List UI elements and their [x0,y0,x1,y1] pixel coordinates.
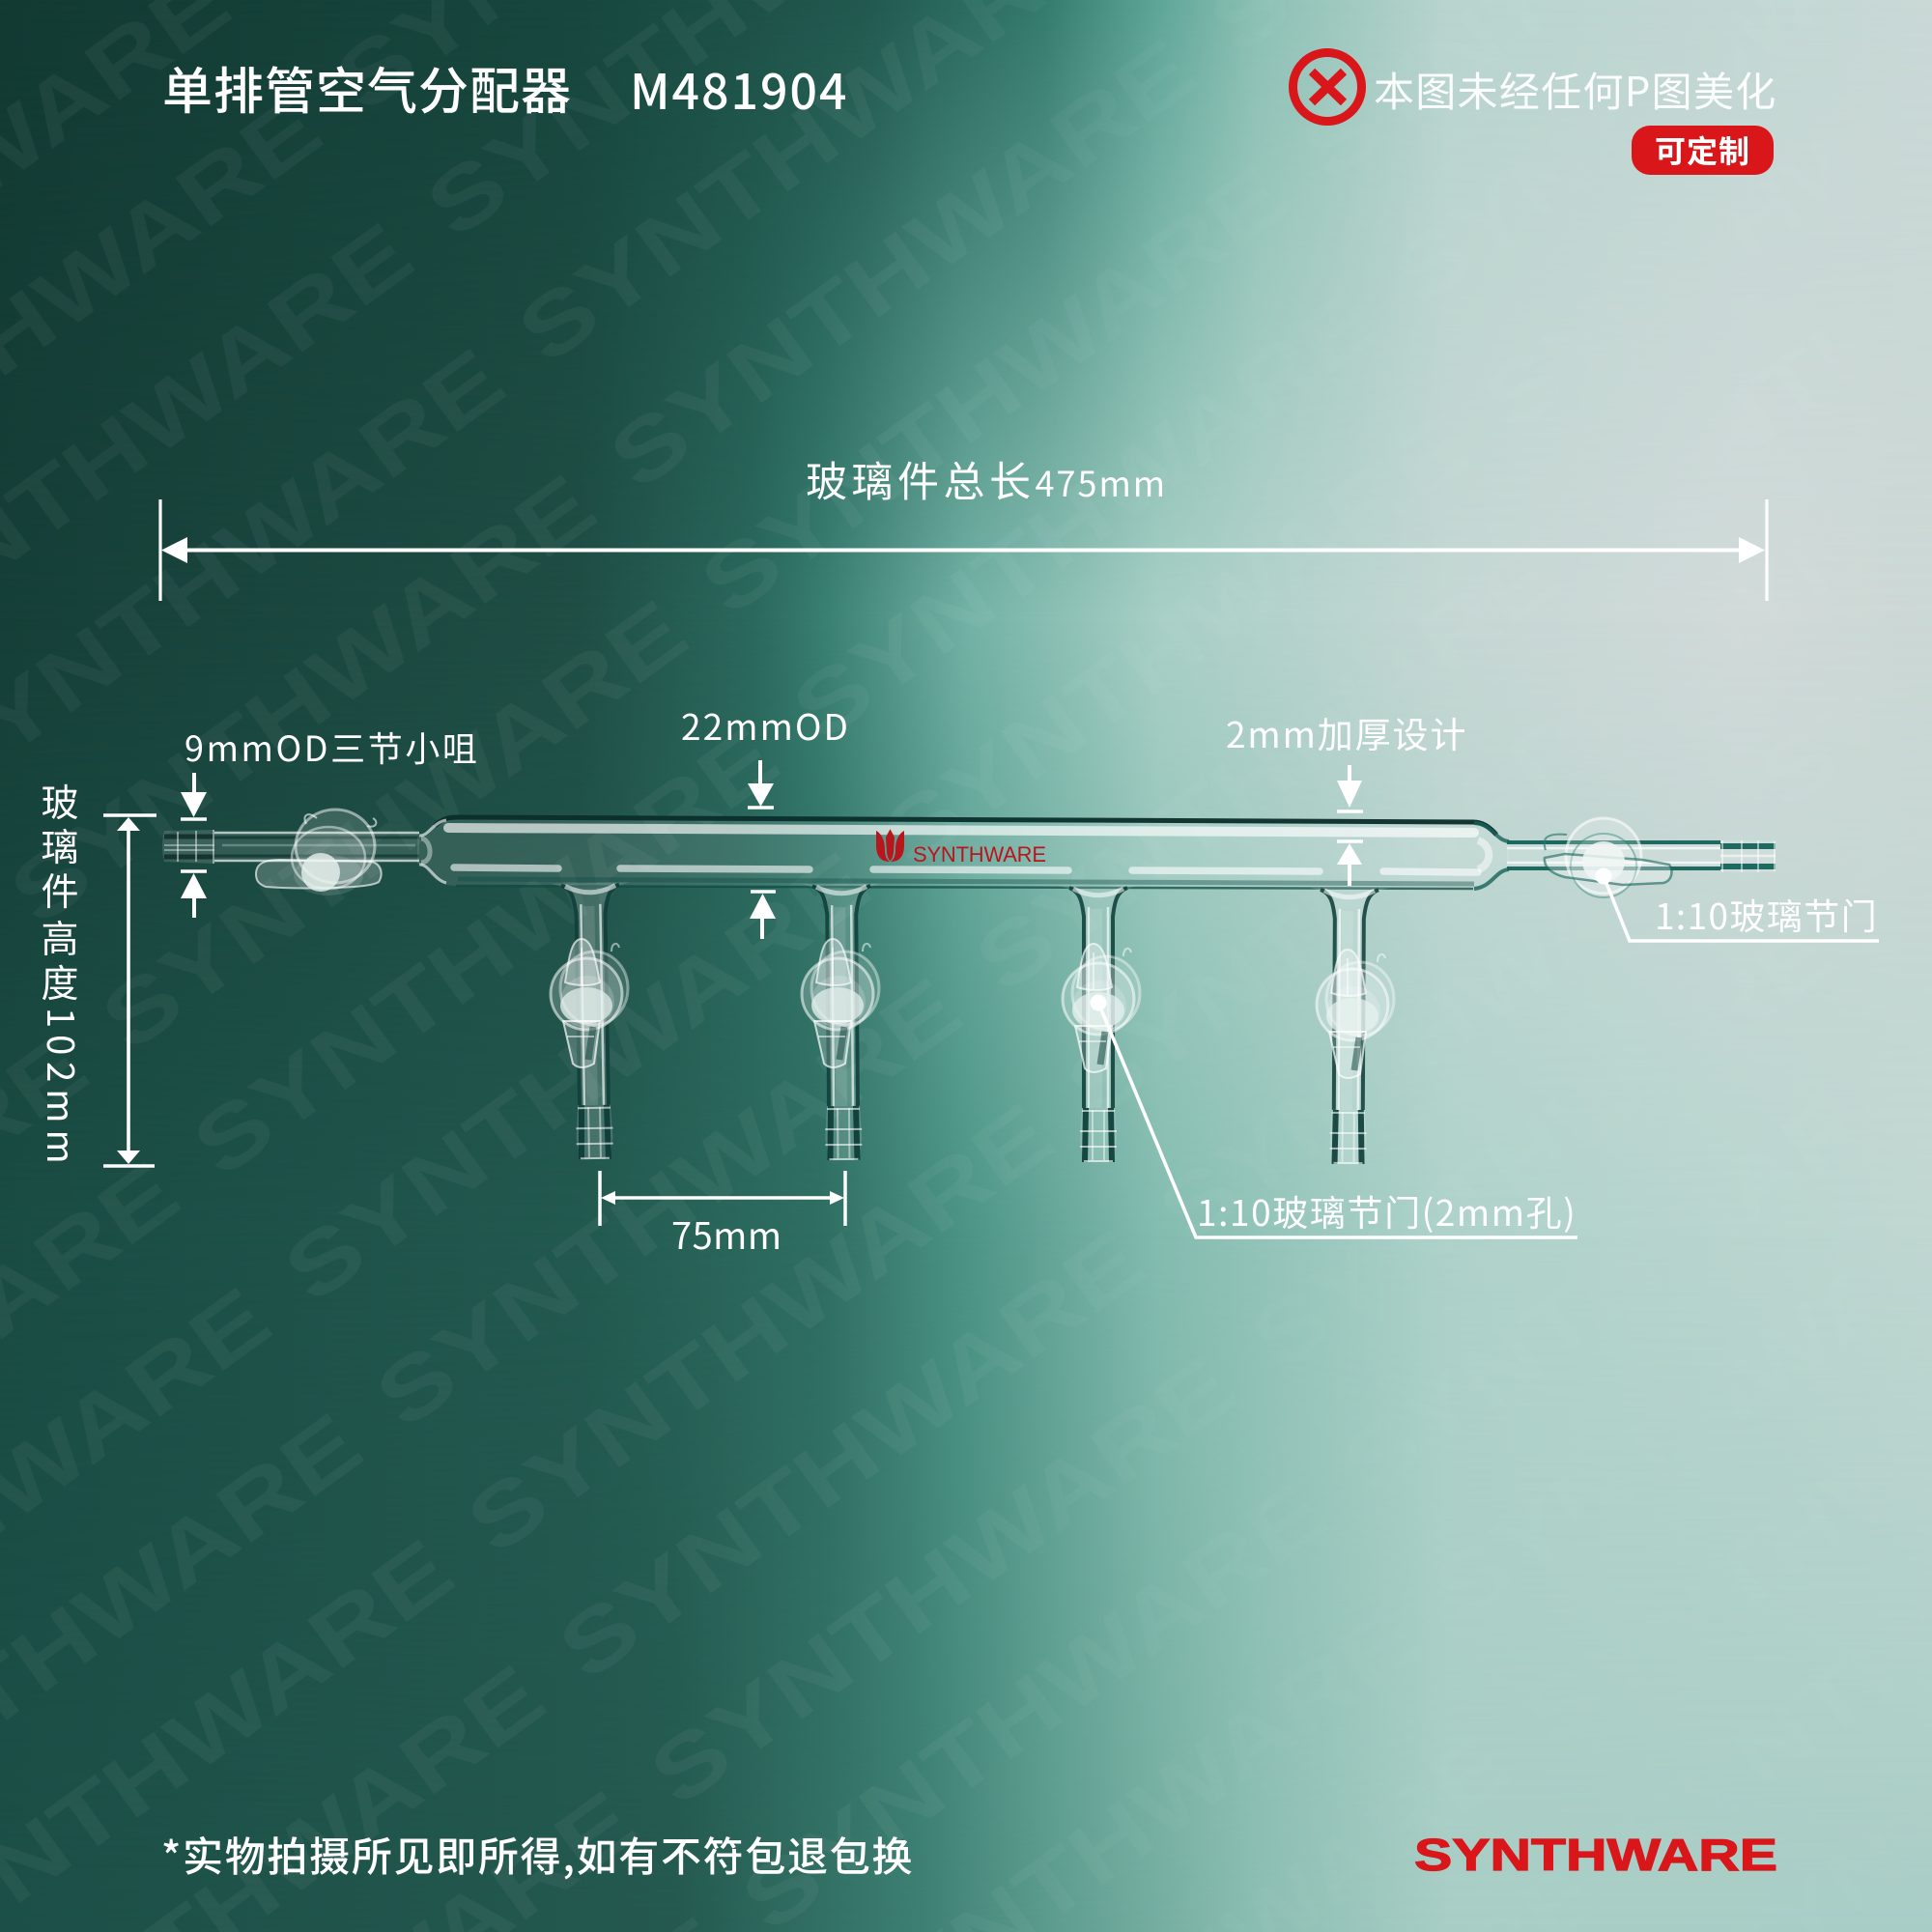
left stopcock [256,810,382,895]
callout label: 1:10玻璃节门 [1655,888,1878,940]
badge: customizable [1632,126,1774,175]
callout: branch stopcock [1090,995,1577,1237]
height label vertical text: 件 [41,863,79,917]
height label vertical text: 璃 [41,818,79,872]
height label vertical text: 度 [41,954,79,1009]
manifold logo [876,829,1046,867]
footer note: *实物拍摄所见即所得,如有不符包退包换 [161,1825,914,1884]
branch tube 1 [550,882,636,1160]
right outlet tube [1507,840,1720,870]
stopcock 3 [1063,944,1140,1072]
label: wall thickness: 2mm加厚设计 [1226,706,1467,758]
arrows: nozzle OD [181,773,207,918]
notice text: 本图未经任何P图美化 [1374,60,1777,119]
height label vertical text: 高 [41,910,79,964]
stopcock 1 [551,939,628,1067]
branch tube 4 [1308,888,1390,1164]
logo wordmark: SYNTHWARE [913,842,1046,867]
brand logo: SYNTHWARE [1414,1830,1777,1880]
dimension: height [103,815,156,1166]
left inlet tube [214,833,419,862]
icon: red cross circle [1293,52,1362,122]
dimension: branch spacing [600,1171,845,1260]
height label vertical text: 102mm [37,1008,90,1171]
right stopcock [1545,818,1671,897]
stopcock 2 [802,939,879,1067]
label: manifold OD: 22mmOD [681,698,850,751]
label: nozzle OD: 9mmOD三节小咀 [185,722,480,772]
right hose nozzle [1720,840,1776,872]
manifold body [417,816,1509,889]
title: M481904 [630,54,848,124]
height label vertical text [37,774,90,1171]
badge: customizable: 可定制 [1655,128,1750,172]
height label vertical text: 玻 [41,774,79,828]
stopcock 4 [1317,950,1394,1078]
glass manifold [162,810,1776,1164]
spacing label: 75mm [671,1207,782,1260]
title: 单排管空气分配器 [162,51,572,124]
icon: tulip logo [876,829,904,862]
watermark pattern [0,0,950,1932]
left hose nozzle [162,830,214,864]
arrows: manifold OD [748,760,776,939]
branch tube 2 [801,884,884,1160]
dimension: total length [160,449,1767,601]
arrows: wall thickness [1337,765,1363,886]
callout label: 1:10玻璃节门(2mm孔) [1197,1184,1577,1236]
callout: right stopcock [1596,867,1879,941]
branch tube 3 [1058,886,1139,1162]
total length label: 玻璃件总长475mm [806,449,1167,509]
